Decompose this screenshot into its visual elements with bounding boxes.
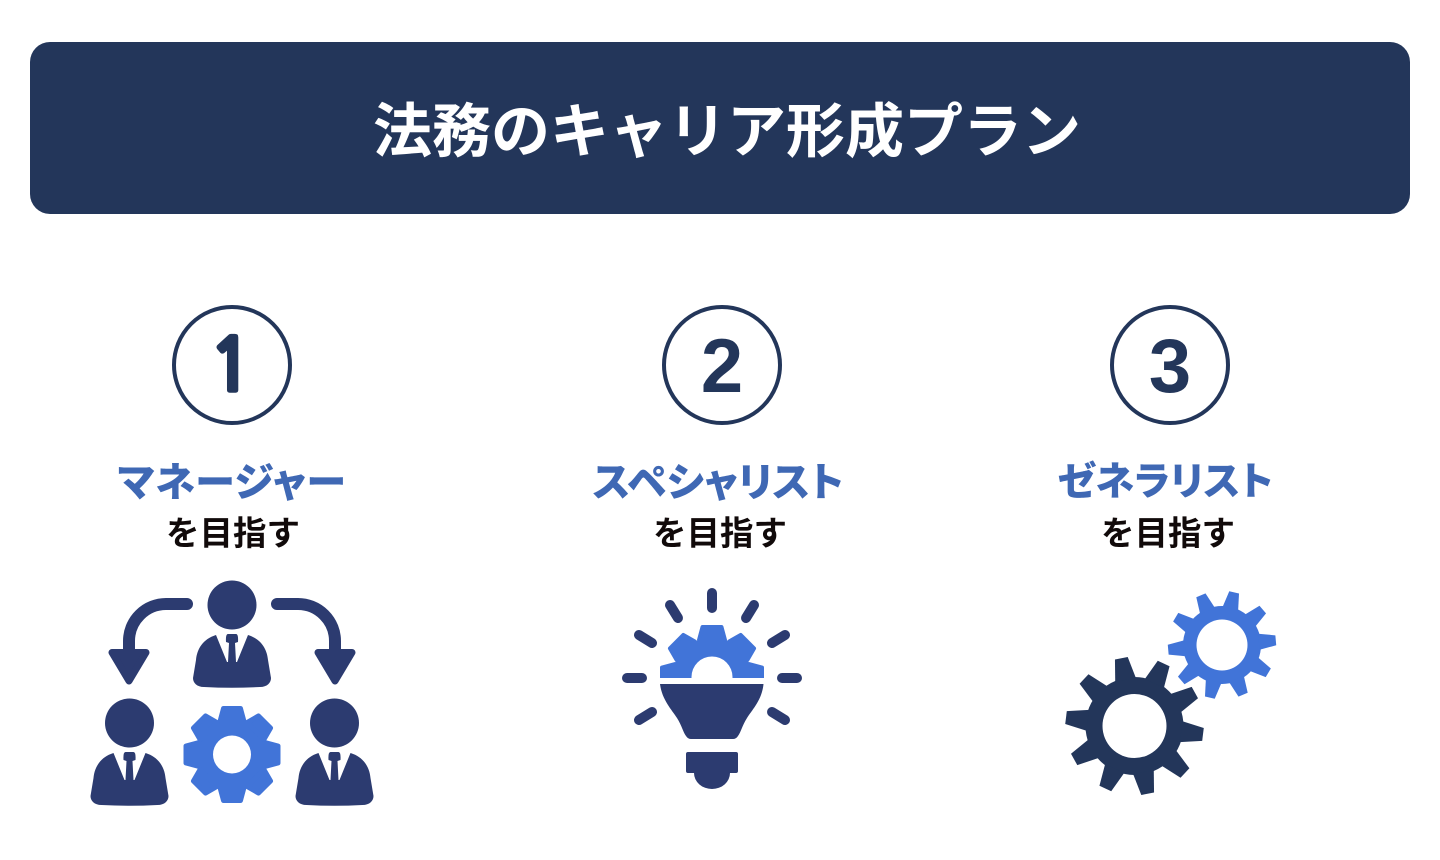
number 1 badge <box>174 307 290 423</box>
number 3 badge <box>1112 307 1228 423</box>
role label: specialist <box>592 461 844 553</box>
icon: left person <box>90 698 168 806</box>
number 1 badge: 1 <box>209 330 253 402</box>
icon: right person <box>296 698 374 806</box>
number 2 badge: 2 <box>701 324 743 409</box>
specialist name: スペシャリスト <box>592 461 844 505</box>
icon: top person <box>193 580 271 688</box>
role label: manager <box>118 461 346 553</box>
arrow: right <box>277 604 352 681</box>
number 3 badge: 3 <box>1149 324 1191 409</box>
role label: generalist <box>1057 460 1273 553</box>
generalist name: ゼネラリスト <box>1057 461 1273 504</box>
manager aim: を目指す <box>166 516 300 553</box>
icon: gear <box>186 708 278 800</box>
icon: manager team <box>90 580 374 806</box>
number 2 badge <box>664 307 780 423</box>
header banner <box>30 42 1410 214</box>
generalist aim: を目指す <box>1101 516 1235 553</box>
title: 法務のキャリア形成プラン <box>373 99 1081 165</box>
icon: bulb body <box>660 684 764 739</box>
icon: two gears <box>1065 591 1276 796</box>
icon: blue gear <box>1168 591 1276 699</box>
icon: half gear <box>660 625 764 678</box>
specialist aim: を目指す <box>653 516 787 553</box>
arrow: left <box>112 604 187 681</box>
manager name: マネージャー <box>118 461 346 505</box>
icon: light bulb with gear <box>627 593 797 789</box>
graphics layer: numbers and icons <box>90 305 1276 806</box>
icon: dark gear <box>1065 656 1204 796</box>
icon: rays <box>627 593 797 720</box>
icon: bulb base <box>686 752 738 789</box>
